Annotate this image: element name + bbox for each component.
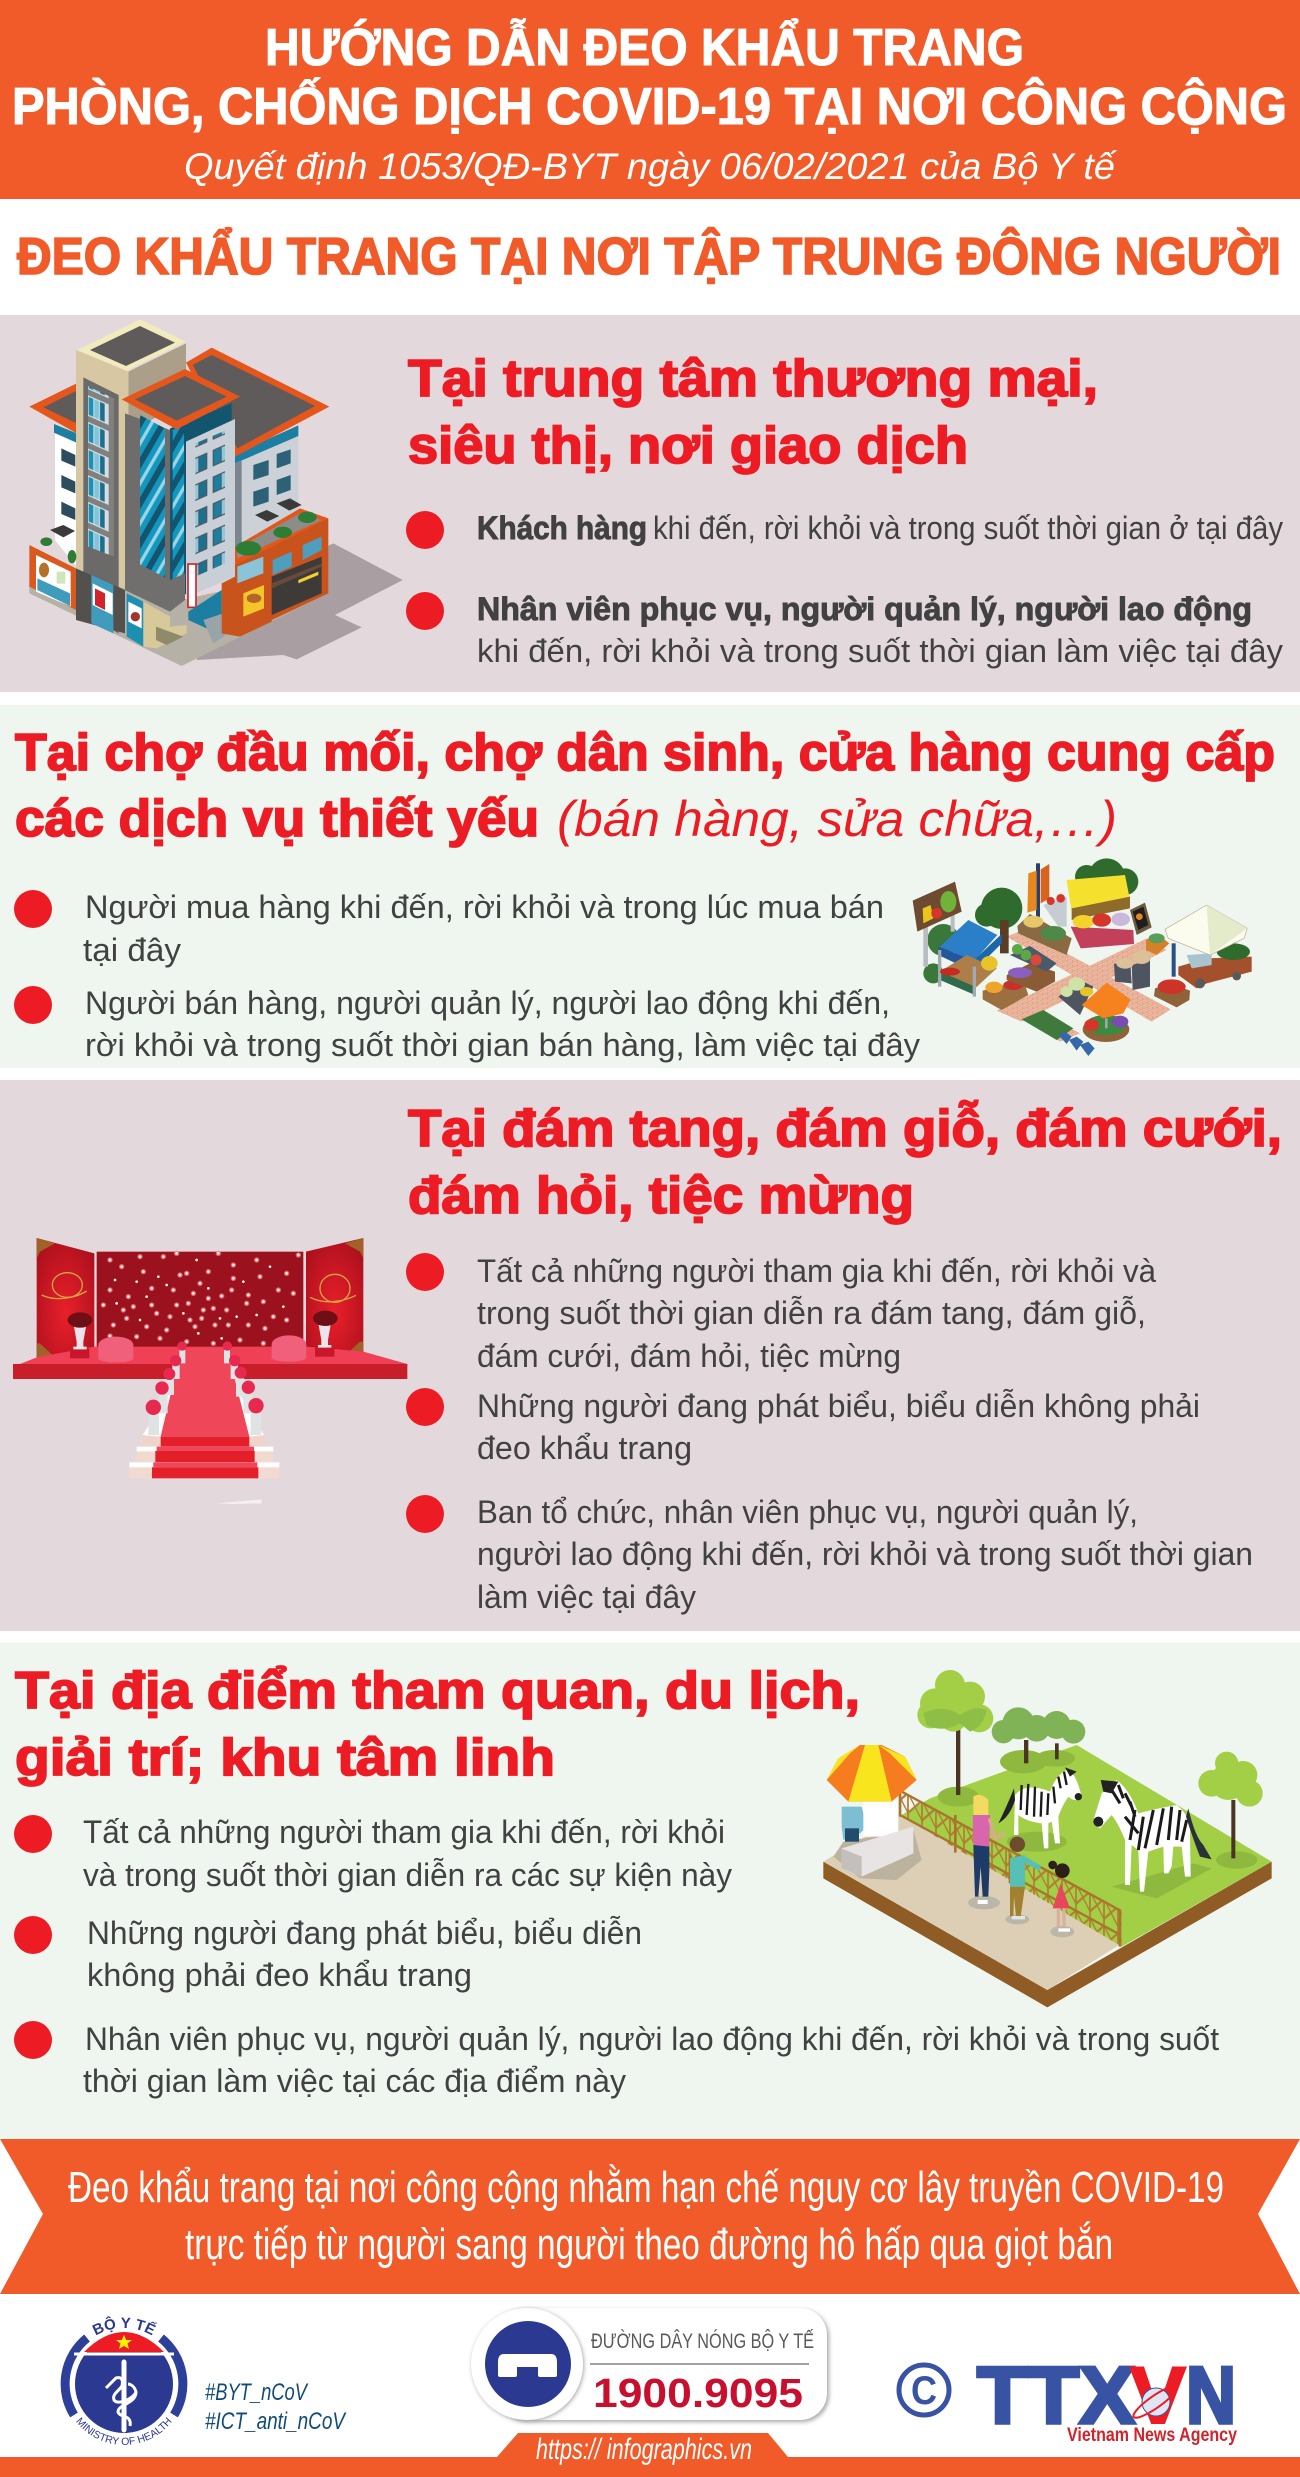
header banner bbox=[0, 0, 1300, 199]
bullet: staff bbox=[406, 591, 1283, 669]
bullet: speakers bbox=[14, 1915, 642, 1993]
icon: isometric commercial building bbox=[29, 319, 403, 666]
bullet: speakers: không phải đeo khẩu trang bbox=[87, 1957, 472, 1993]
website footer bbox=[0, 2433, 1300, 2477]
bullet: speakers and performers: Những người đang phát biểu, biểu diễn không phải bbox=[477, 1388, 1200, 1424]
bullet: staff at sites: thời gian làm việc tại các địa điểm này bbox=[83, 2063, 626, 2099]
logo: copyright TTXVN: Vietnam News Agency bbox=[1067, 2425, 1237, 2446]
decision subtitle: Quyết định 1053/QĐ-BYT ngày 06/02/2021 của Bộ Y tế bbox=[184, 146, 1117, 187]
bullet: participants: Tất cả những người tham gia khi đến, rời khỏi bbox=[83, 1814, 725, 1850]
hotline badge bbox=[471, 2308, 829, 2422]
bullet: buyers: tại đây bbox=[83, 932, 181, 968]
bullet: customers: Khách hàng bbox=[477, 510, 647, 546]
panel: markets bbox=[0, 705, 1300, 1068]
logo: copyright TTXVN: TTX bbox=[977, 2351, 1135, 2441]
logo: Ministry of Health: MINISTRY OF HEALTH bbox=[76, 2417, 172, 2445]
logo: Ministry of Health bbox=[60, 2316, 188, 2445]
icon: telephone handset bbox=[485, 2321, 571, 2407]
title line 1: HƯỚNG DẪN ĐEO KHẨU TRANG bbox=[265, 18, 1024, 77]
heading: ceremonies bbox=[408, 1100, 1282, 1225]
heading: markets: Tại chợ đầu mối, chợ dân sinh, cửa hàng cung cấp bbox=[15, 724, 1275, 782]
zebra small bbox=[998, 1767, 1082, 1848]
panel: shopping centres bbox=[0, 315, 1300, 692]
bullet: buyers: Người mua hàng khi đến, rời khỏi và trong lúc mua bán bbox=[85, 889, 884, 925]
logo: copyright TTXVN: V bbox=[1130, 2351, 1186, 2441]
bullet: staff at sites bbox=[14, 2021, 1219, 2099]
hotline badge: 1900.9095 bbox=[593, 2370, 803, 2416]
icon: market stalls bbox=[913, 858, 1252, 1056]
bullet: all participants: Tất cả những người tham gia khi đến, rời khỏi và bbox=[477, 1253, 1156, 1289]
bullet: participants: và trong suốt thời gian diễn ra các sự kiện này bbox=[83, 1857, 732, 1893]
heading: tourist sites: Tại địa điểm tham quan, du lịch, bbox=[15, 1662, 860, 1720]
bullet: customers bbox=[406, 510, 1283, 549]
bullet: staff: Nhân viên phục vụ, người quản lý, người lao động bbox=[477, 591, 1252, 627]
heading: tourist sites bbox=[15, 1662, 860, 1787]
bullet: sellers bbox=[14, 985, 920, 1063]
bullet: all participants: trong suốt thời gian diễn ra đám tang, đám giỗ, bbox=[477, 1295, 1146, 1331]
logo: Ministry of Health: BỘ Y TẾ bbox=[92, 2316, 158, 2336]
icon: zoo with zebras bbox=[823, 1670, 1272, 2007]
bullet: all participants bbox=[406, 1253, 1156, 1374]
visitors bbox=[968, 1795, 1074, 1937]
bullet: speakers and performers: đeo khẩu trang bbox=[477, 1430, 692, 1466]
heading: ceremonies: đám hỏi, tiệc mừng bbox=[408, 1167, 914, 1225]
logo: copyright TTXVN: C bbox=[911, 2369, 937, 2413]
bullet: all participants: đám cưới, đám hỏi, tiệc mừng bbox=[477, 1338, 901, 1374]
bullet: organisers: Ban tổ chức, nhân viên phục vụ, người quản lý, bbox=[477, 1494, 1138, 1530]
panel: tourist sites bbox=[0, 1643, 1300, 2139]
hotline badge: ĐƯỜNG DÂY NÓNG BỘ Y TẾ bbox=[591, 2330, 814, 2353]
logo: copyright TTXVN bbox=[899, 2351, 1237, 2446]
heading: markets bbox=[15, 724, 1275, 848]
website footer: https:// infographics.vn bbox=[536, 2433, 752, 2466]
heading: markets: các dịch vụ thiết yếu bbox=[15, 790, 539, 848]
bullet: buyers bbox=[14, 889, 884, 968]
bullet: participants bbox=[14, 1814, 732, 1893]
panel: ceremonies bbox=[0, 1080, 1300, 1631]
heading: shopping centres: Tại trung tâm thương mại, bbox=[408, 350, 1098, 408]
bullet: staff at sites: Nhân viên phục vụ, người quản lý, người lao động khi đến, rời khỏi và trong suốt bbox=[85, 2021, 1219, 2057]
bullet: organisers: làm việc tại đây bbox=[477, 1579, 696, 1615]
hashtags: #BYT_nCoV bbox=[205, 2379, 309, 2406]
bullet: sellers: rời khỏi và trong suốt thời gian bán hàng, làm việc tại đây bbox=[85, 1027, 920, 1063]
zebra large bbox=[1093, 1780, 1212, 1892]
closing message banner bbox=[0, 2139, 1300, 2294]
hashtags bbox=[205, 2379, 347, 2435]
bullet: organisers: người lao động khi đến, rời khỏi và trong suốt thời gian bbox=[477, 1536, 1253, 1572]
bullet: organisers bbox=[406, 1494, 1253, 1615]
heading: tourist sites: giải trí; khu tâm linh bbox=[15, 1729, 555, 1787]
heading: shopping centres bbox=[408, 350, 1098, 475]
bullet: speakers and performers bbox=[406, 1388, 1200, 1466]
heading: ceremonies: Tại đám tang, đám giỗ, đám cưới, bbox=[408, 1100, 1282, 1158]
heading: markets: (bán hàng, sửa chữa,…) bbox=[557, 791, 1117, 847]
icon: wedding stage bbox=[13, 1238, 407, 1504]
logo: copyright TTXVN: N bbox=[1186, 2351, 1236, 2441]
bullet: speakers: Những người đang phát biểu, biểu diễn bbox=[87, 1915, 642, 1951]
bullet: staff: khi đến, rời khỏi và trong suốt thời gian làm việc tại đây bbox=[477, 633, 1283, 669]
hashtags: #ICT_anti_nCoV bbox=[205, 2408, 347, 2435]
bullet: sellers: Người bán hàng, người quản lý, người lao động khi đến, bbox=[85, 985, 890, 1021]
heading: shopping centres: siêu thị, nơi giao dịch bbox=[408, 417, 968, 475]
